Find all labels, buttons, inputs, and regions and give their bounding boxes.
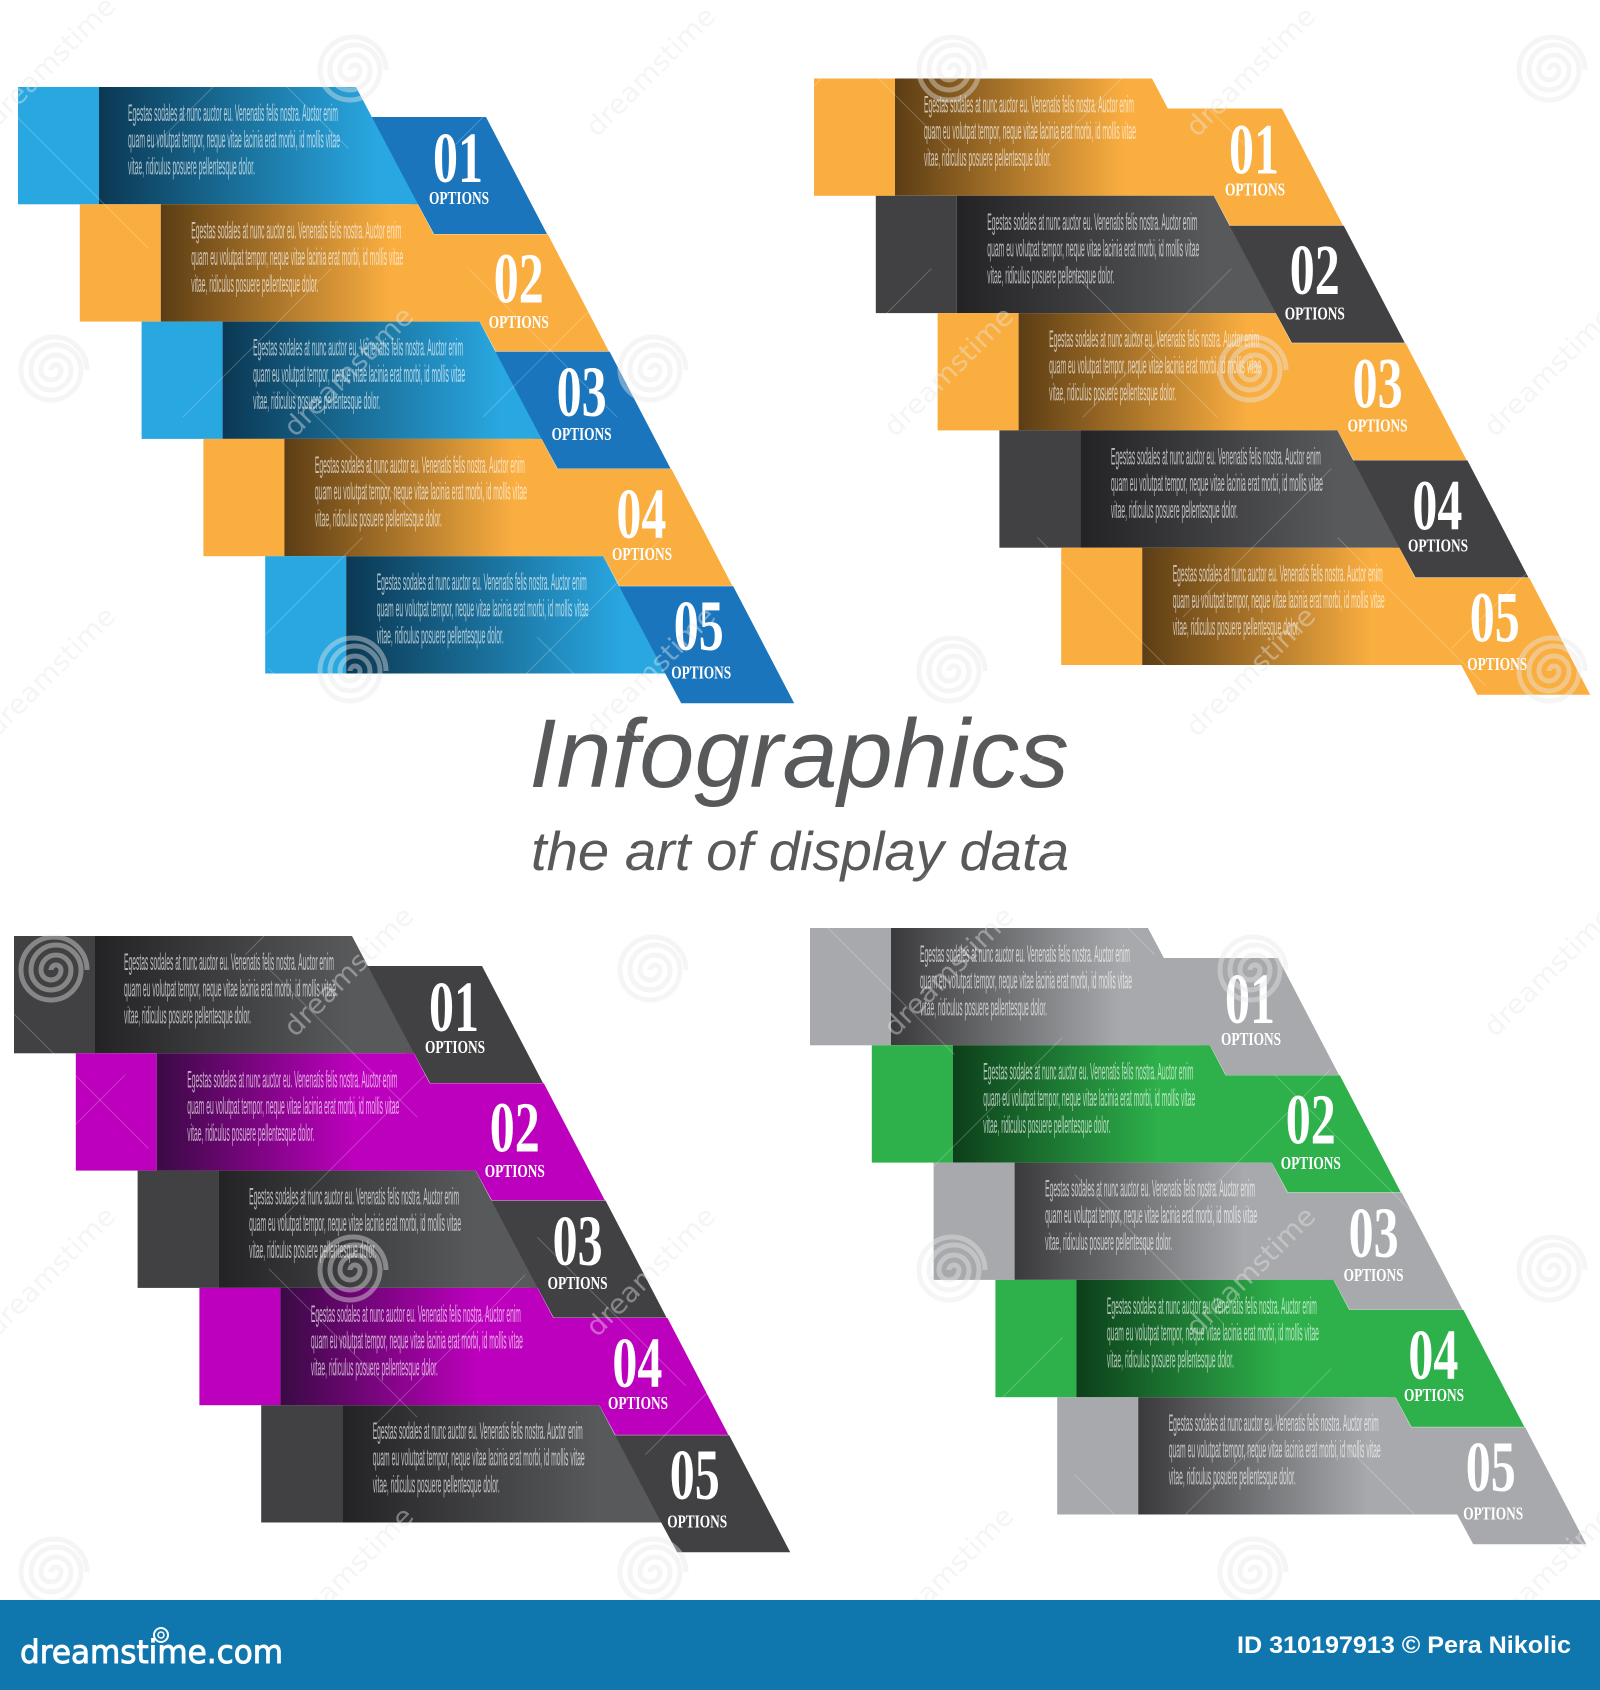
number 01: OPTIONS: [429, 188, 489, 208]
watermark text: dreamstime: [278, 901, 420, 1043]
number 04: OPTIONS: [612, 544, 672, 564]
tab: [418, 1083, 605, 1200]
number 01: OPTIONS: [1221, 1029, 1281, 1049]
watermark text: dreamstime: [278, 1501, 420, 1643]
panel: blue and orange steps: [18, 87, 794, 703]
body text: [1045, 1176, 1257, 1256]
number 04: OPTIONS: [1404, 1385, 1464, 1405]
step 02 orange: Egestas sodales at nunc auctor eu. Venenatis felis nostra. Auctor enim: [191, 217, 401, 244]
step 03 orange: [938, 313, 1467, 460]
band: [953, 1045, 1272, 1163]
number 02: OPTIONS: [1285, 303, 1345, 323]
band: [95, 936, 414, 1053]
step 02 magenta: Egestas sodales at nunc auctor eu. Venenatis felis nostra. Auctor enim: [187, 1066, 397, 1093]
body text: [191, 217, 403, 298]
step 01 blue: vitae, ridiculus posuere pellentesque dolor.: [128, 154, 255, 180]
fold square: [995, 1280, 1076, 1397]
tab: [1156, 108, 1343, 226]
fold square: [1061, 548, 1142, 665]
number 03: OPTIONS: [548, 1273, 608, 1293]
tab: [607, 586, 794, 703]
body text: [187, 1066, 399, 1147]
watermark text: dreamstime: [1180, 1, 1322, 143]
body text: [373, 1418, 585, 1499]
step 04 magenta: Egestas sodales at nunc auctor eu. Venenatis felis nostra. Auctor enim: [311, 1301, 521, 1328]
number 05: [1467, 578, 1527, 674]
watermark text: dreamstime: [878, 901, 1020, 1043]
step 05 dark: Egestas sodales at nunc auctor eu. Venenatis felis nostra. Auctor enim: [373, 1418, 583, 1445]
band: [280, 1288, 599, 1405]
body text: [987, 209, 1199, 289]
band: [1142, 548, 1461, 665]
step 05 grey: [1057, 1397, 1586, 1544]
fold square: [810, 928, 891, 1045]
tab: [1341, 460, 1528, 577]
tab: [1276, 1193, 1463, 1310]
body text: [1107, 1293, 1319, 1373]
step 03 blue: vitae, ridiculus posuere pellentesque dolor.: [253, 388, 380, 415]
step 02 dark: vitae, ridiculus posuere pellentesque dolor.: [987, 262, 1114, 289]
step 03 blue: quam eu volutpat tempor, neque vitae lacinia erat morbi, id mollis vitae: [253, 361, 465, 388]
step 01 dark: vitae, ridiculus posuere pellentesque dolor.: [124, 1002, 251, 1030]
band: [346, 556, 665, 674]
step 01 grey: [810, 928, 1339, 1075]
number 05: 05: [674, 586, 724, 666]
watermark text: dreamstime: [580, 601, 722, 743]
step 01 dark: [14, 936, 543, 1083]
number 04: 04: [616, 474, 666, 554]
number 03: [548, 1201, 608, 1293]
band: [1076, 1280, 1395, 1397]
tab: [1280, 343, 1467, 460]
number 02: 02: [1286, 1079, 1336, 1159]
fold square: [138, 1171, 219, 1288]
watermark text: dreamstime: [580, 1201, 722, 1343]
step 05 blue: vitae, ridiculus posuere pellentesque dolor.: [377, 623, 504, 650]
number 01: 01: [429, 967, 479, 1047]
tab: [1337, 1310, 1524, 1427]
number 02: [485, 1087, 545, 1181]
step 02 magenta: [76, 1053, 605, 1200]
tab: [484, 352, 671, 469]
body text: [1111, 443, 1323, 524]
step 05 dark: [261, 1405, 790, 1552]
number 01: [1225, 110, 1285, 200]
step 02 green: vitae, ridiculus posuere pellentesque dolor.: [983, 1112, 1110, 1139]
step 05 orange: [1061, 548, 1590, 695]
number 03: OPTIONS: [1344, 1265, 1404, 1285]
step 03 blue: Egestas sodales at nunc auctor eu. Venenatis felis nostra. Auctor enim: [253, 335, 463, 362]
number 02: [489, 238, 549, 332]
tab: [603, 1435, 790, 1552]
tab: [1399, 1427, 1586, 1544]
band: [219, 1171, 538, 1288]
number 05: OPTIONS: [667, 1512, 727, 1532]
number 05: [1463, 1427, 1523, 1524]
fold square: [203, 439, 284, 556]
footer bar: [0, 1600, 1600, 1690]
band: [99, 87, 418, 204]
tab: [356, 966, 543, 1083]
tab: [1152, 958, 1339, 1075]
body text: [920, 941, 1132, 1022]
band: [1080, 430, 1399, 548]
step 05 blue: Egestas sodales at nunc auctor eu. Venenatis felis nostra. Auctor enim: [377, 569, 587, 596]
watermark text: dreamstime: [1180, 601, 1322, 743]
step 01 dark: Egestas sodales at nunc auctor eu. Venenatis felis nostra. Auctor enim: [124, 949, 334, 976]
tab: [422, 234, 609, 351]
fold square: [14, 936, 95, 1053]
step 04 green: [995, 1280, 1524, 1427]
step 04 dark: [999, 430, 1528, 577]
body text: [1169, 1410, 1381, 1491]
number 02: 02: [1290, 230, 1340, 310]
body text: [924, 92, 1136, 172]
step 03 grey: vitae, ridiculus posuere pellentesque dolor.: [1045, 1229, 1172, 1256]
step 02 green: [872, 1045, 1401, 1192]
step 03 dark: [138, 1171, 667, 1318]
step 01 orange: vitae, ridiculus posuere pellentesque dolor.: [924, 145, 1051, 172]
watermark text: dreamstime: [580, 1, 722, 143]
fold square: [142, 322, 223, 439]
number 05: [667, 1435, 727, 1532]
band: [895, 78, 1214, 196]
body text: [128, 100, 340, 180]
body text: [124, 949, 336, 1030]
number 05: 05: [670, 1435, 720, 1515]
band: [1019, 313, 1338, 430]
fold square: [261, 1405, 342, 1522]
step 04 magenta: vitae, ridiculus posuere pellentesque dolor.: [311, 1354, 438, 1381]
number 05: [671, 586, 731, 683]
body text: [1173, 561, 1385, 641]
number 01: OPTIONS: [425, 1037, 485, 1057]
fold square: [934, 1163, 1015, 1280]
step 04 green: vitae, ridiculus posuere pellentesque dolor.: [1107, 1346, 1234, 1373]
step 04 orange: quam eu volutpat tempor, neque vitae lacinia erat morbi, id mollis vitae: [315, 478, 527, 505]
body text: [983, 1058, 1195, 1139]
step 03 blue: [142, 322, 671, 469]
fold square: [199, 1288, 280, 1405]
body text: [249, 1184, 461, 1264]
body text: [1049, 326, 1261, 407]
step 04 dark: vitae, ridiculus posuere pellentesque dolor.: [1111, 497, 1238, 524]
fold square: [872, 1045, 953, 1163]
tab: [1403, 578, 1590, 695]
number 04: [608, 1323, 668, 1413]
step 05 dark: quam eu volutpat tempor, neque vitae lacinia erat morbi, id mollis vitae: [373, 1445, 585, 1472]
panel: dark and magenta steps: [14, 936, 790, 1552]
watermark text: dreamstime: [878, 301, 1020, 443]
body text: [253, 335, 465, 415]
number 05: 05: [1470, 578, 1520, 658]
step 04 magenta: quam eu volutpat tempor, neque vitae lacinia erat morbi, id mollis vitae: [311, 1327, 523, 1354]
number 01: [425, 967, 485, 1057]
step 02 orange: vitae, ridiculus posuere pellentesque dolor.: [191, 271, 318, 298]
step 01 orange: [814, 78, 1343, 226]
number 03: OPTIONS: [1348, 416, 1408, 436]
fold square: [18, 87, 99, 204]
fold square: [1057, 1397, 1138, 1514]
step 03 dark: Egestas sodales at nunc auctor eu. Venenatis felis nostra. Auctor enim: [249, 1184, 459, 1211]
band: [1138, 1397, 1457, 1514]
number 01: 01: [1229, 110, 1279, 190]
band: [957, 196, 1276, 313]
number 02: [1285, 230, 1345, 323]
step 04 orange: vitae, ridiculus posuere pellentesque dolor.: [315, 505, 442, 532]
band: [891, 928, 1210, 1045]
number 03: 03: [1349, 1193, 1399, 1273]
step 01 dark: quam eu volutpat tempor, neque vitae lacinia erat morbi, id mollis vitae: [124, 976, 336, 1002]
panel: grey and green steps: [810, 928, 1586, 1544]
step 02 orange: [80, 204, 609, 351]
number 02: 02: [490, 1087, 540, 1167]
band: [342, 1405, 661, 1522]
fold square: [76, 1053, 157, 1171]
panel: orange and dark steps: [814, 78, 1590, 695]
number 05: 05: [1466, 1427, 1516, 1507]
watermark text: dreamstime: [278, 301, 420, 443]
number 03: [1344, 1193, 1404, 1285]
number 03: 03: [1353, 344, 1403, 424]
band: [1015, 1163, 1334, 1280]
number 01: 01: [433, 118, 483, 198]
fold square: [80, 204, 161, 322]
subtitle: the art of display data: [531, 820, 1069, 882]
number 03: [552, 352, 612, 444]
band: [223, 322, 542, 439]
number 03: 03: [557, 352, 607, 432]
number 03: 03: [553, 1201, 603, 1281]
step 05 blue: [265, 556, 794, 703]
band: [157, 1053, 476, 1171]
number 02: [1281, 1079, 1341, 1173]
watermark text: dreamstime: [878, 1501, 1020, 1643]
step 02 magenta: vitae, ridiculus posuere pellentesque dolor.: [187, 1120, 314, 1147]
number 04: [1404, 1315, 1464, 1405]
number 02: OPTIONS: [489, 312, 549, 332]
step 02 magenta: quam eu volutpat tempor, neque vitae lacinia erat morbi, id mollis vitae: [187, 1093, 399, 1120]
number 04: [612, 474, 672, 564]
number 05: OPTIONS: [671, 663, 731, 683]
fold square: [876, 196, 957, 313]
body text: [311, 1301, 523, 1381]
step 03 grey: [934, 1163, 1463, 1310]
number 02: OPTIONS: [485, 1161, 545, 1181]
body text: [315, 452, 527, 532]
fold square: [265, 556, 346, 674]
number 04: 04: [612, 1323, 662, 1403]
title: Infographics: [529, 699, 1069, 808]
number 05: OPTIONS: [1463, 1504, 1523, 1524]
tab: [545, 469, 732, 586]
tab: [541, 1318, 728, 1435]
number 01: 01: [1225, 959, 1275, 1039]
image credit: ID 310197913 © Pera Nikolic: [1237, 1632, 1571, 1659]
number 03: [1348, 344, 1408, 436]
number 01: [429, 118, 489, 208]
tab: [360, 117, 547, 234]
number 03: OPTIONS: [552, 424, 612, 444]
number 04: OPTIONS: [608, 1393, 668, 1413]
number 01: OPTIONS: [1225, 180, 1285, 200]
fold square: [938, 313, 1019, 430]
step 04 magenta: [199, 1288, 728, 1435]
band: [161, 204, 480, 322]
number 04: 04: [1412, 465, 1462, 545]
step 01 blue: Egestas sodales at nunc auctor eu. Venenatis felis nostra. Auctor enim: [128, 100, 338, 127]
band: [284, 439, 603, 556]
step 03 dark: vitae, ridiculus posuere pellentesque dolor.: [249, 1237, 376, 1264]
step 03 orange: vitae, ridiculus posuere pellentesque dolor.: [1049, 380, 1176, 407]
step 05 blue: quam eu volutpat tempor, neque vitae lacinia erat morbi, id mollis vitae: [377, 596, 589, 623]
step 01 blue: [18, 87, 547, 234]
body text: [377, 569, 589, 650]
fold square: [999, 430, 1080, 548]
tab: [1214, 1075, 1401, 1192]
fold square: [814, 78, 895, 196]
number 02: OPTIONS: [1281, 1153, 1341, 1173]
footer logo: dreamstime.com: [20, 1633, 283, 1671]
number 04: OPTIONS: [1408, 535, 1468, 555]
step 04 orange: [203, 439, 732, 586]
number 04: [1408, 465, 1468, 555]
step 03 dark: quam eu volutpat tempor, neque vitae lacinia erat morbi, id mollis vitae: [249, 1210, 461, 1237]
number 04: 04: [1408, 1315, 1458, 1395]
step 01 grey: vitae, ridiculus posuere pellentesque dolor.: [920, 994, 1047, 1022]
step 02 dark: [876, 196, 1405, 343]
step 04 orange: Egestas sodales at nunc auctor eu. Venenatis felis nostra. Auctor enim: [315, 452, 525, 479]
tab: [480, 1201, 667, 1318]
number 02: 02: [494, 238, 544, 318]
step 02 orange: quam eu volutpat tempor, neque vitae lacinia erat morbi, id mollis vitae: [191, 244, 403, 271]
number 01: [1221, 959, 1281, 1049]
step 05 dark: vitae, ridiculus posuere pellentesque dolor.: [373, 1472, 500, 1499]
number 05: OPTIONS: [1467, 654, 1527, 674]
watermark text: dreamstime: [1180, 1201, 1322, 1343]
step 01 blue: quam eu volutpat tempor, neque vitae lacinia erat morbi, id mollis vitae: [128, 126, 340, 154]
tab: [1218, 226, 1405, 343]
